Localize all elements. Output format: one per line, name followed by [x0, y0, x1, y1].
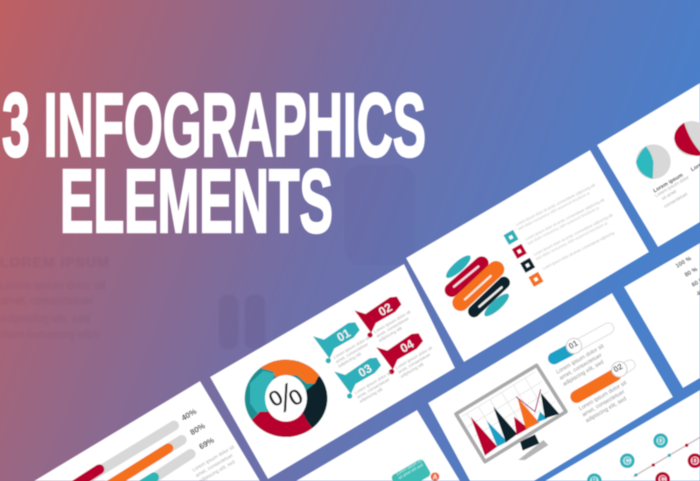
tag descriptions: amet, consectetuer	[375, 316, 410, 339]
slide: bar chart: 80%	[188, 421, 207, 437]
ghost background slide: LOREM IPSUM	[0, 254, 110, 270]
pill descriptions	[555, 343, 628, 424]
tag descriptions: Lorem ipsum dolor sit	[354, 370, 393, 395]
progress pill 02: 02	[611, 361, 625, 374]
progress pill 02	[577, 361, 630, 397]
ghost background slide	[0, 165, 415, 349]
tag descriptions: amet, consectetuer	[356, 377, 391, 400]
slide: percentages: 100 %	[675, 256, 693, 270]
slide: bar chart: Lorem ipsum dolor sit	[191, 444, 236, 473]
slide: bar chart: amet, consectetuer	[195, 452, 235, 479]
tag descriptions: adipiscing elit	[378, 325, 403, 343]
tag 03	[335, 358, 381, 399]
marker icons	[506, 232, 541, 284]
pill descriptions: amet, consectetuer	[559, 352, 603, 382]
crimson pie	[674, 121, 700, 156]
slide: timeline	[545, 390, 700, 481]
slide: percentages	[624, 243, 700, 388]
pill descriptions: amet, consectetuer	[581, 389, 626, 418]
tag descriptions: Lorem ipsum dolor sit	[373, 309, 412, 334]
sphere text: sed diam nonummy nibh euismod tincidunt ut	[526, 205, 601, 246]
tag descriptions: amet, consectetuer	[335, 341, 370, 364]
node D crimson: D	[692, 456, 698, 465]
ghost background slide: Lorem ipsum dolor sit	[0, 280, 105, 292]
sphere text: Lorem ipsum dolor sit amet, consectetuer adipiscing elit	[533, 212, 614, 257]
slide: sphere	[406, 150, 649, 362]
title: ELEMENTS	[60, 152, 333, 252]
donut chart	[244, 358, 328, 438]
tag descriptions: adipiscing elit	[399, 361, 425, 379]
tag descriptions: Lorem ipsum dolor sit	[332, 334, 371, 360]
sphere text: sed diam nonummy nibh euismod tincidunt ut	[535, 220, 609, 261]
slide: bar chart: 40%	[180, 407, 198, 423]
pill descriptions: Lorem ipsum dolor sit	[555, 343, 606, 376]
slide: teal box	[296, 410, 460, 481]
title	[2, 76, 426, 252]
monitor chart	[456, 365, 566, 462]
sliced sphere	[443, 252, 512, 319]
slide: teal box: Lorem ipsum dolor	[395, 455, 427, 476]
tag descriptions: amet, consectetuer	[397, 352, 432, 375]
donut chart: %	[263, 374, 309, 423]
sphere text: Lorem ipsum dolor sit amet, consectetuer adipiscing	[542, 230, 615, 271]
teal pie	[636, 144, 671, 179]
slide: donut with tags	[210, 264, 455, 479]
sphere text: Lorem ipsum dolor sit amet, consectetuer adipiscing elit	[515, 182, 597, 227]
slide: teal box: A	[433, 475, 438, 481]
sphere text	[515, 182, 615, 271]
slide: monitor	[428, 293, 673, 481]
ghost background slide: amet, consectetuer	[0, 295, 94, 307]
slide: teal box: sit amet elit sed	[397, 462, 424, 480]
sphere text: sed diam nonummy nibh euismod tincidunt ut	[517, 190, 591, 231]
slide: pies: consectetuer	[663, 191, 689, 209]
tag 02	[355, 297, 401, 338]
ghost background slide: adipiscing elit, sed	[0, 313, 90, 325]
progress pill 01	[554, 328, 608, 358]
slide: pies	[597, 83, 700, 247]
tag descriptions: adipiscing elit	[337, 351, 363, 369]
slide group	[34, 83, 700, 481]
slide: pies: Lorem ipsum dolor	[654, 174, 690, 198]
slide: percentages: 80 %	[684, 266, 699, 279]
pill descriptions: Lorem ipsum dolor sit	[578, 380, 628, 412]
tag descriptions	[332, 309, 434, 404]
ghost background slide: diam nonummy nibh	[0, 329, 99, 341]
sphere text: Lorem ipsum dolor sit amet, consectetuer adipiscing elit	[524, 197, 606, 242]
tag 04	[377, 334, 423, 374]
node D teal: D	[658, 436, 664, 445]
tag descriptions: Lorem ipsum dolor sit	[395, 345, 434, 370]
pill descriptions: adipiscing elit, sed	[562, 359, 605, 388]
tag 04: 04	[398, 337, 417, 356]
slide: pies: Lorem ipsum	[652, 172, 685, 194]
slide: pies: sit amet	[661, 188, 678, 201]
pill descriptions: adipiscing elit, sed	[585, 396, 628, 424]
slide: bar chart: 69%	[197, 436, 216, 451]
tag descriptions: adipiscing elit	[358, 386, 384, 404]
tag 03: 03	[356, 361, 375, 380]
tag 01: 01	[334, 326, 353, 345]
slide: bar chart	[34, 381, 260, 481]
tag 02: 02	[376, 300, 395, 319]
tag 01	[313, 323, 359, 363]
node C teal: C	[624, 456, 630, 465]
progress pill 01: 01	[567, 338, 580, 351]
